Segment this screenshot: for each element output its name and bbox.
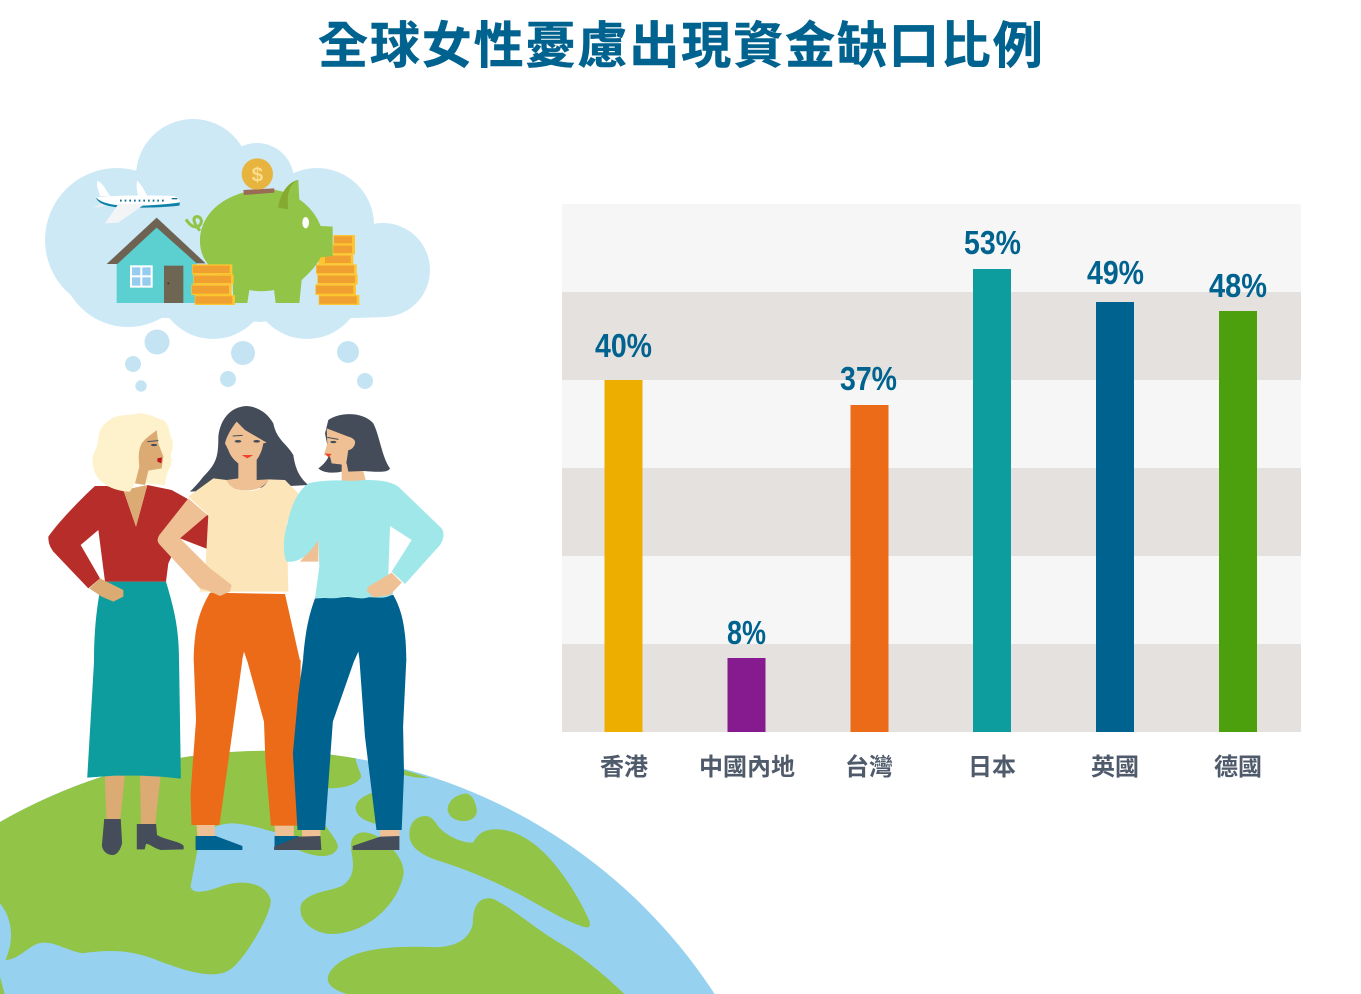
left woman legs xyxy=(87,660,184,855)
icon: coin stack left xyxy=(191,264,235,305)
bar: 英國 49% xyxy=(1087,254,1144,781)
icon: piggy bank: $ xyxy=(252,163,264,186)
illustration: lower legs and shoes xyxy=(87,660,406,855)
bar: 英國 49%: 英國 xyxy=(1091,754,1139,781)
bar: 台灣 37%: 台灣 xyxy=(845,753,893,781)
bar: 香港 40% xyxy=(595,327,652,781)
middle woman legs xyxy=(191,660,301,850)
right woman xyxy=(284,414,443,661)
icon: house xyxy=(107,218,206,303)
cloud shape xyxy=(45,119,430,339)
bar: 德國 48%: 48% xyxy=(1209,267,1267,304)
icon: piggy bank xyxy=(186,158,333,303)
icon: airplane xyxy=(93,181,180,223)
bar: 德國 48%: 德國 xyxy=(1214,754,1262,781)
globe ocean xyxy=(0,740,730,994)
bar: 日本 53%: 53% xyxy=(964,224,1021,261)
middle woman hair xyxy=(190,406,308,492)
bar: 中國內地 8%: 8% xyxy=(727,614,766,651)
bar: 日本 53%: 日本 xyxy=(968,754,1016,781)
thought bubbles xyxy=(125,330,373,392)
right woman legs xyxy=(274,660,406,850)
chart striped background xyxy=(562,204,1301,732)
bar: 日本 53% xyxy=(964,224,1021,781)
left woman xyxy=(48,413,209,661)
title: 全球女性憂慮出現資金缺口比例 xyxy=(318,18,1045,74)
globe land masses xyxy=(0,727,624,994)
icon: coin stack right xyxy=(315,235,359,305)
cloud contents xyxy=(93,158,359,305)
bar: 台灣 37% xyxy=(840,360,897,781)
bar: 英國 49%: 49% xyxy=(1087,254,1144,291)
middle woman xyxy=(158,422,300,661)
illustration: three women upper bodies xyxy=(48,406,443,661)
illustration: globe xyxy=(0,750,714,994)
bar: 中國內地 8%: 中國內地 xyxy=(699,754,795,781)
bar chart xyxy=(562,204,1301,781)
illustration: thought cloud xyxy=(45,119,430,392)
bar: 德國 48% xyxy=(1209,267,1267,781)
bar: 香港 40%: 40% xyxy=(595,327,652,364)
bar: 香港 40%: 香港 xyxy=(600,754,648,781)
bar: 台灣 37%: 37% xyxy=(840,360,897,397)
bar: 中國內地 8% xyxy=(699,614,795,781)
